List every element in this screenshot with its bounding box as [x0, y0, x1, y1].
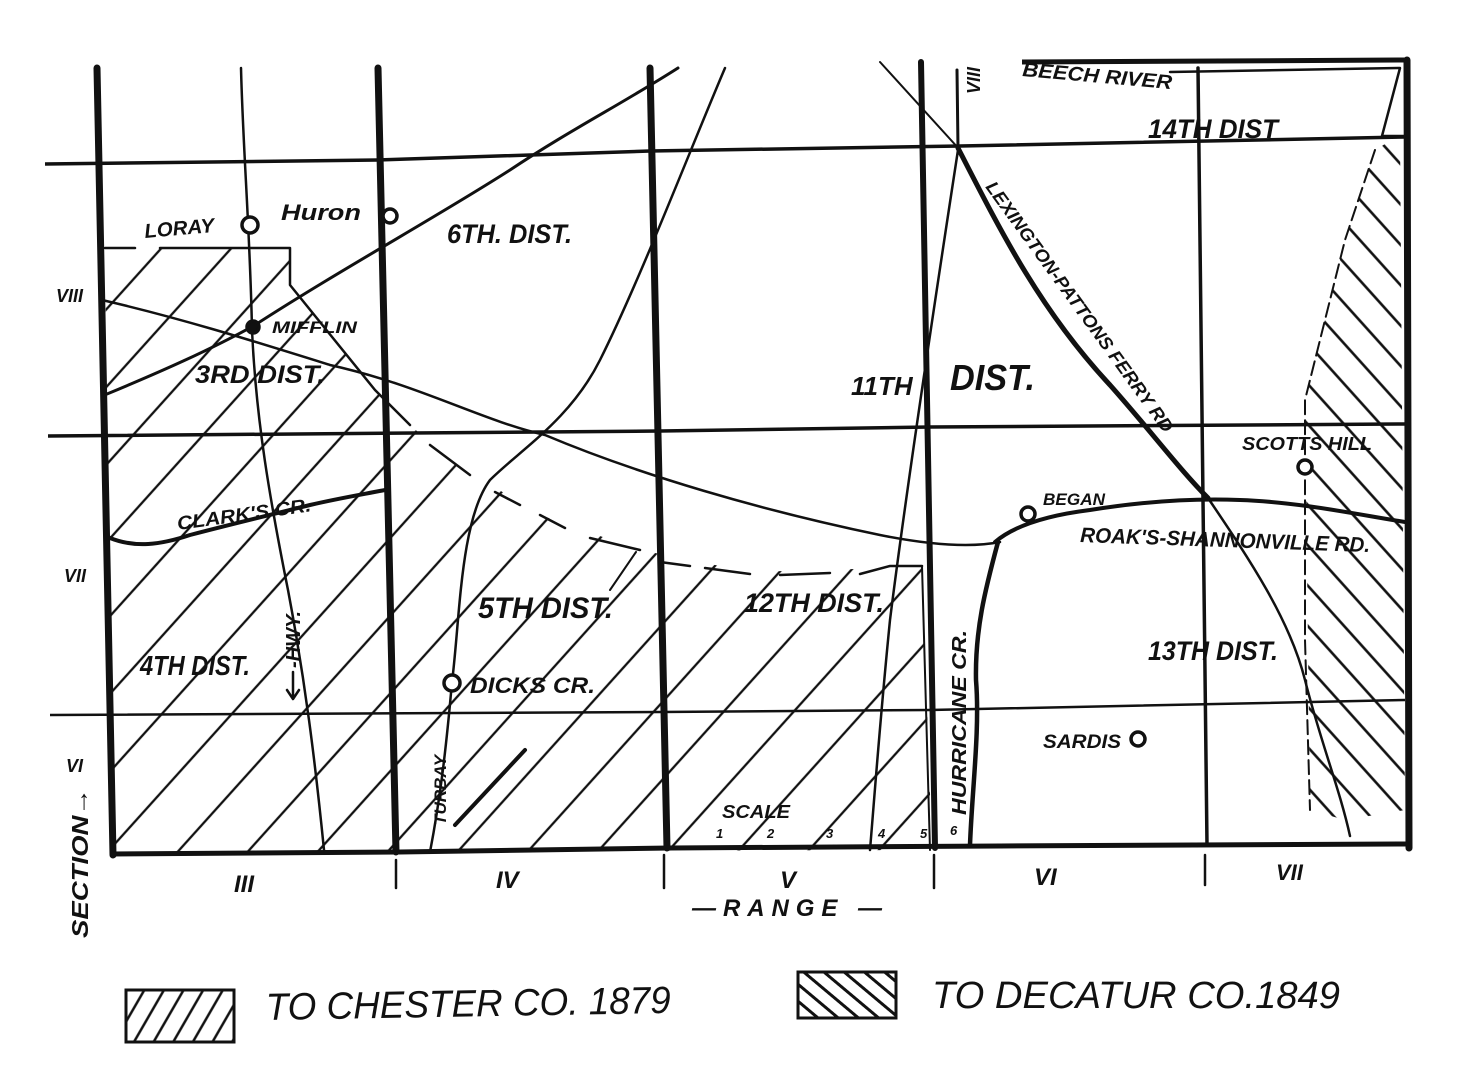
- map labels: 4TH DIST.: [139, 650, 250, 681]
- scale numbers: 1: [716, 826, 723, 841]
- map labels: DIST.: [950, 357, 1035, 398]
- map labels: [139, 59, 1372, 825]
- scale numbers: 6: [950, 823, 958, 838]
- Beech River: [1170, 68, 1405, 136]
- road: north-south through Loray: [241, 68, 324, 850]
- map labels: LORAY: [144, 215, 217, 243]
- map labels: 3RD DIST.: [195, 361, 325, 389]
- range roman numerals: IV: [496, 867, 521, 894]
- section roman numerals: VI: [66, 756, 84, 776]
- range axis label: —RANGE —: [691, 895, 883, 922]
- Roak's-Shannonville Rd: [995, 499, 1405, 542]
- road: south of Roak's: [1208, 498, 1350, 836]
- section roman numerals: VIII: [964, 66, 984, 94]
- road: 11th Dist. line: [870, 150, 958, 850]
- Clarks Creek: [110, 490, 385, 544]
- map labels: 13TH DIST.: [1148, 636, 1278, 666]
- map labels: MIFFLIN: [272, 318, 358, 337]
- hatched area: to Chester Co.: [100, 240, 940, 855]
- section roman numerals: VIII: [56, 286, 84, 306]
- map labels: BEGAN: [1043, 490, 1106, 509]
- map labels: ROAK'S-SHANNONVILLE RD.: [1080, 524, 1370, 557]
- range roman numerals: V: [780, 867, 798, 894]
- map labels: 12TH DIST.: [744, 588, 884, 618]
- range roman numerals: VII: [1276, 860, 1304, 885]
- arrow on highway label: [287, 672, 299, 699]
- map labels: CLARK'S CR.: [176, 495, 312, 535]
- map labels: HURRICANE CR.: [949, 630, 971, 815]
- scale numbers: 3: [826, 826, 834, 841]
- map labels: -HWY.: [283, 611, 305, 668]
- map labels: LEXINGTON-PATTONS FERRY RD: [982, 178, 1177, 436]
- scale numbers: 2: [766, 826, 775, 841]
- roads and rivers: [102, 62, 1405, 888]
- road: Lexington-Pattons Ferry: [958, 148, 1208, 498]
- scale numbers: 5: [920, 826, 928, 841]
- section roman numerals: [56, 66, 984, 776]
- road: Lexington diagonal upper: [880, 62, 960, 150]
- map labels: DICKS CR.: [470, 673, 595, 698]
- town markers: [242, 209, 1312, 746]
- map labels: 11TH: [851, 371, 914, 401]
- vertical range lines: [97, 60, 1409, 855]
- legend: Chester Co.: [126, 980, 671, 1042]
- road: diagonal through Mifflin: [107, 68, 678, 394]
- Chester boundary: [105, 248, 922, 575]
- map labels: 6TH. DIST.: [447, 219, 572, 249]
- range roman numerals: III: [234, 871, 255, 898]
- section roman numerals: VII: [64, 566, 87, 586]
- Hurricane Cr.: [970, 542, 998, 845]
- hatched area: to Decatur Co.: [1305, 144, 1405, 818]
- map labels: SCALE: [722, 802, 791, 822]
- road: Huron region to Roak's: [102, 300, 1000, 545]
- range roman numerals: VI: [1034, 864, 1058, 891]
- map labels: 5TH DIST.: [478, 592, 613, 625]
- scale numbers: 4: [877, 826, 886, 841]
- section axis label: SECTION→: [67, 788, 93, 938]
- map labels: Huron: [281, 200, 361, 225]
- range roman numerals: [234, 860, 1304, 898]
- map labels: SARDIS: [1043, 732, 1121, 753]
- legend: Decatur Co.: TO DECATUR CO.1849: [932, 975, 1340, 1017]
- horizontal section lines: [45, 60, 1409, 854]
- Decatur boundary: [1305, 150, 1375, 810]
- heavy road stub at Turbay: [455, 750, 525, 825]
- map labels: BEECH RIVER: [1022, 59, 1174, 94]
- range tick marks: [396, 855, 1205, 888]
- map labels: SCOTTS HILL: [1242, 434, 1372, 454]
- scale numbers: [716, 823, 958, 841]
- road: Dicks Cr. line: [430, 68, 725, 852]
- legend: Chester Co.: TO CHESTER CO. 1879: [265, 980, 671, 1029]
- map labels: 14TH DIST: [1148, 114, 1280, 144]
- map labels: TURBAY: [431, 753, 450, 825]
- legend: Decatur Co.: [798, 972, 1340, 1018]
